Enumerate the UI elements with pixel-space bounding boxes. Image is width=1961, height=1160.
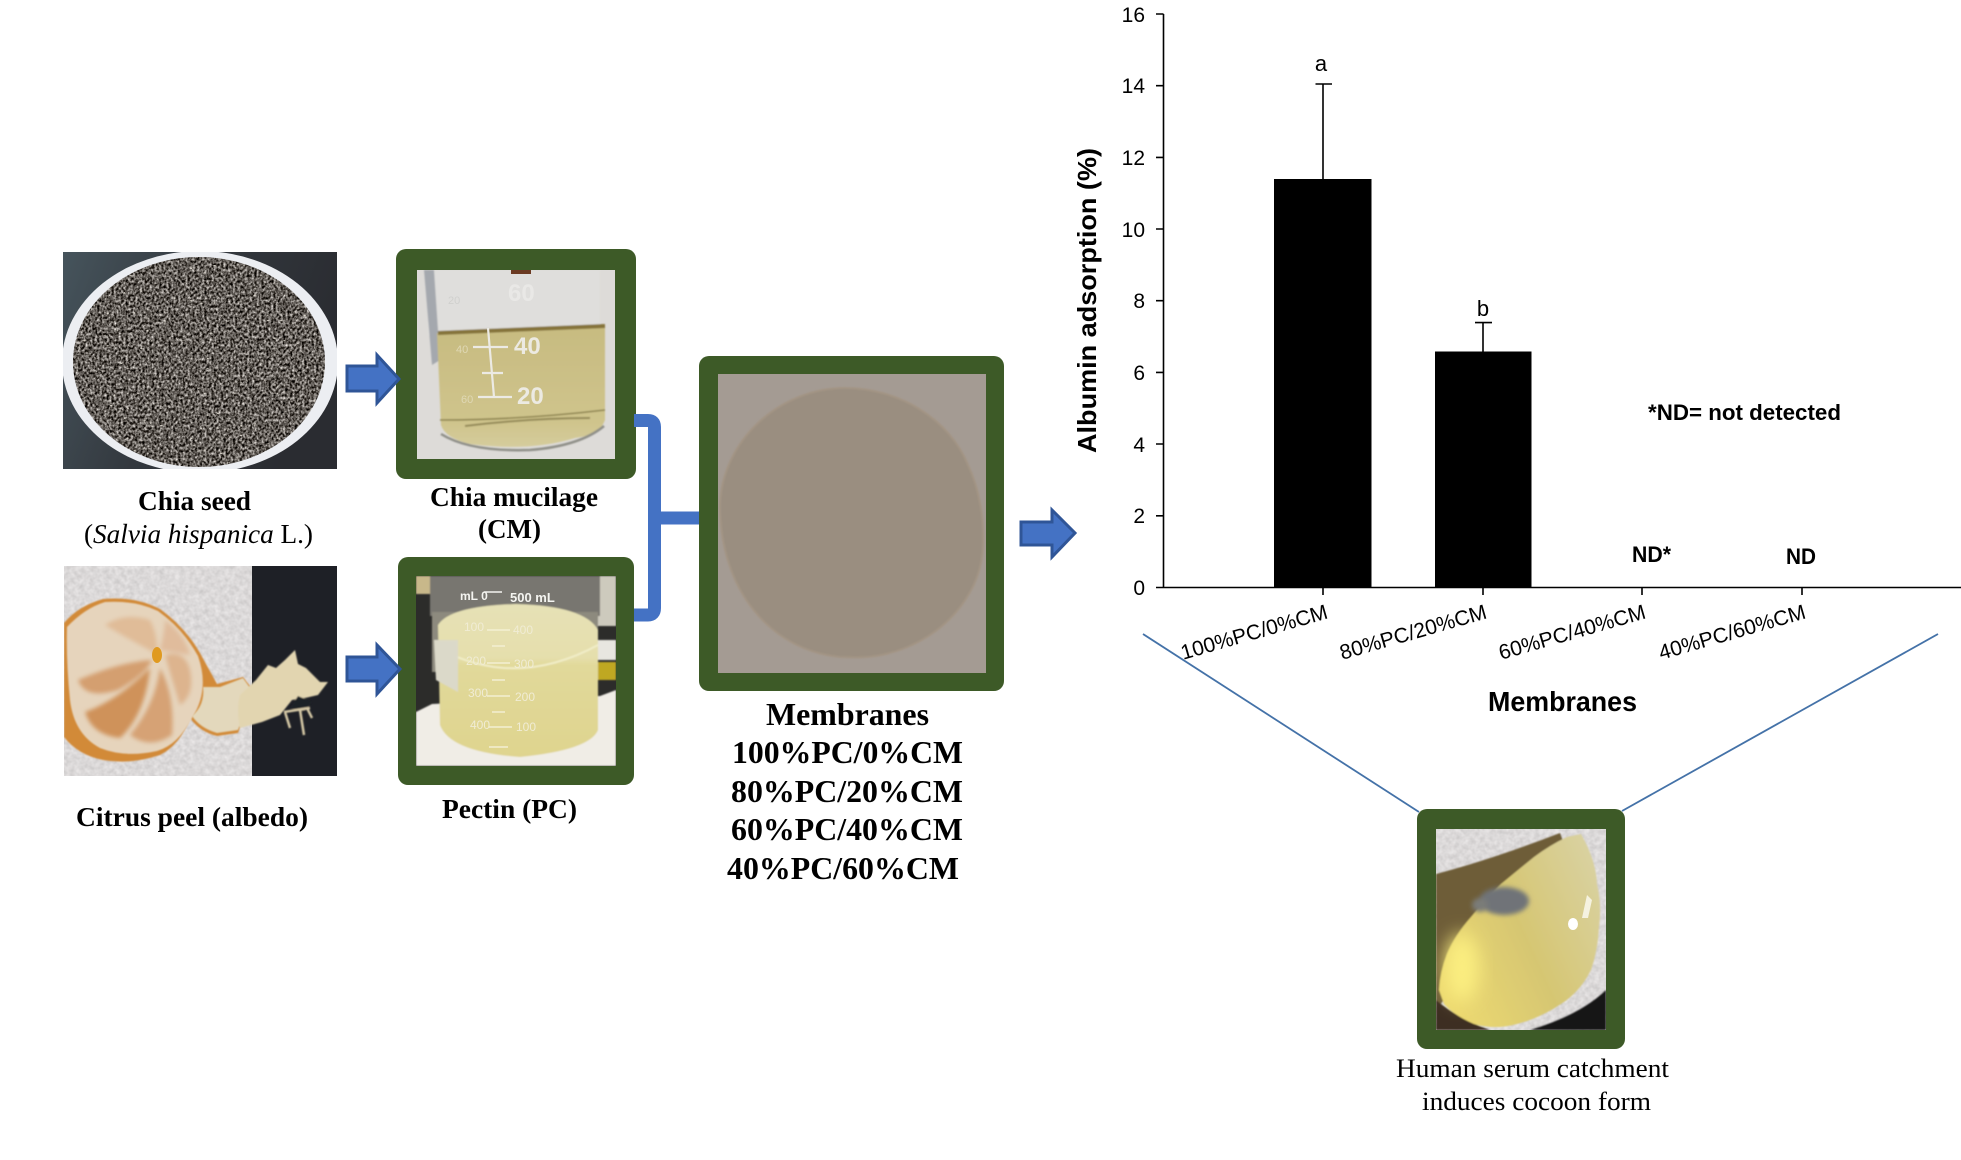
note: ND definition: *ND= not detected bbox=[1648, 400, 1841, 425]
panel: pectin: 400 bbox=[470, 718, 490, 732]
significance letter b: b bbox=[1477, 296, 1489, 321]
caption: pectin: Pectin (PC) bbox=[442, 794, 577, 824]
panel: pectin: 200 bbox=[466, 654, 486, 668]
bar chart: albumin adsorption bbox=[1072, 4, 1961, 717]
error bars bbox=[1316, 84, 1492, 352]
significance letter a: a bbox=[1315, 51, 1328, 76]
y axis tick labels: 16 bbox=[1122, 4, 1145, 27]
x axis category labels bbox=[1178, 601, 1808, 665]
caption: cocoon form bbox=[1396, 1054, 1670, 1116]
x axis title: Membranes bbox=[1488, 686, 1637, 717]
label: ND star: ND* bbox=[1632, 542, 1671, 567]
label: ND: ND bbox=[1786, 544, 1816, 569]
panel: pectin: 400 bbox=[513, 623, 533, 637]
photo: chia seed bbox=[62, 251, 338, 473]
panel: pectin: 300 bbox=[514, 657, 534, 671]
x axis category labels: 60%PC/40%CM bbox=[1496, 601, 1648, 665]
caption: chia seed bbox=[84, 486, 313, 549]
caption: cocoon form: induces cocoon form bbox=[1422, 1087, 1651, 1116]
caption: membranes list: 40%PC/60%CM bbox=[727, 850, 959, 886]
panel: pectin: 200 bbox=[515, 690, 535, 704]
y axis tick labels: 8 bbox=[1133, 290, 1145, 313]
caption: citrus peel: Citrus peel (albedo) bbox=[76, 802, 308, 832]
caption: cocoon form: Human serum catchment bbox=[1396, 1054, 1670, 1083]
y axis tick labels: 14 bbox=[1122, 75, 1145, 98]
photo: citrus peel bbox=[64, 566, 337, 776]
panel: chia mucilage: 40 bbox=[456, 344, 468, 356]
panel: cocoon form bbox=[1417, 809, 1625, 1049]
caption: membranes list: 60%PC/40%CM bbox=[731, 811, 963, 847]
y axis tick labels: 4 bbox=[1133, 434, 1145, 457]
panel: chia mucilage bbox=[396, 249, 636, 479]
caption: membranes list bbox=[727, 696, 963, 886]
y axis tick labels: 12 bbox=[1122, 147, 1145, 170]
arrow: membranes to chart bbox=[1021, 510, 1075, 557]
panel: chia mucilage: 60 bbox=[461, 394, 473, 406]
y axis tick labels: 10 bbox=[1122, 219, 1145, 242]
caption: membranes list: 100%PC/0%CM bbox=[732, 734, 963, 770]
panel: pectin bbox=[398, 557, 634, 785]
y axis title: Albumin adsorption (%) bbox=[1072, 148, 1102, 453]
caption: membranes list: Membranes bbox=[766, 696, 929, 732]
arrow: citrus peel to pectin bbox=[347, 645, 400, 694]
x axis category labels: 100%PC/0%CM bbox=[1178, 601, 1330, 665]
y axis tick labels: 0 bbox=[1133, 577, 1145, 600]
panel: chia mucilage: 40 bbox=[514, 333, 541, 360]
bar: 100%PC/0%CM bbox=[1274, 179, 1372, 588]
panel: chia mucilage: 60 bbox=[508, 280, 535, 307]
panel: chia mucilage: 20 bbox=[448, 295, 460, 307]
panel: pectin: 100 bbox=[516, 720, 536, 734]
axes and ticks bbox=[1156, 14, 1961, 595]
panel: pectin: 500 mL bbox=[510, 590, 555, 605]
panel: chia mucilage: 20 bbox=[517, 383, 544, 410]
bar: 80%PC/20%CM bbox=[1435, 352, 1532, 588]
y axis tick labels bbox=[1122, 4, 1145, 600]
caption: membranes list: 80%PC/20%CM bbox=[731, 773, 963, 809]
y axis tick labels: 6 bbox=[1133, 362, 1145, 385]
caption: chia seed: (Salvia hispanica L.) bbox=[84, 519, 313, 549]
panel: pectin: 300 bbox=[468, 686, 488, 700]
connector: CM and PC join bbox=[634, 420, 699, 615]
x axis category labels: 80%PC/20%CM bbox=[1337, 601, 1489, 665]
panel: pectin: 100 bbox=[464, 620, 484, 634]
caption: chia mucilage: Chia mucilage bbox=[430, 482, 598, 512]
caption: chia mucilage bbox=[430, 482, 598, 544]
x axis category labels: 40%PC/60%CM bbox=[1656, 601, 1808, 665]
y axis tick labels: 2 bbox=[1133, 505, 1145, 528]
caption: chia mucilage: (CM) bbox=[478, 514, 541, 544]
panel: membrane bbox=[699, 356, 1004, 691]
caption: chia seed: Chia seed bbox=[138, 486, 251, 516]
panel: pectin: mL 0 bbox=[460, 589, 488, 603]
arrow: chia seed to mucilage bbox=[347, 355, 399, 403]
zoom lines to cocoon photo bbox=[1143, 634, 1938, 812]
